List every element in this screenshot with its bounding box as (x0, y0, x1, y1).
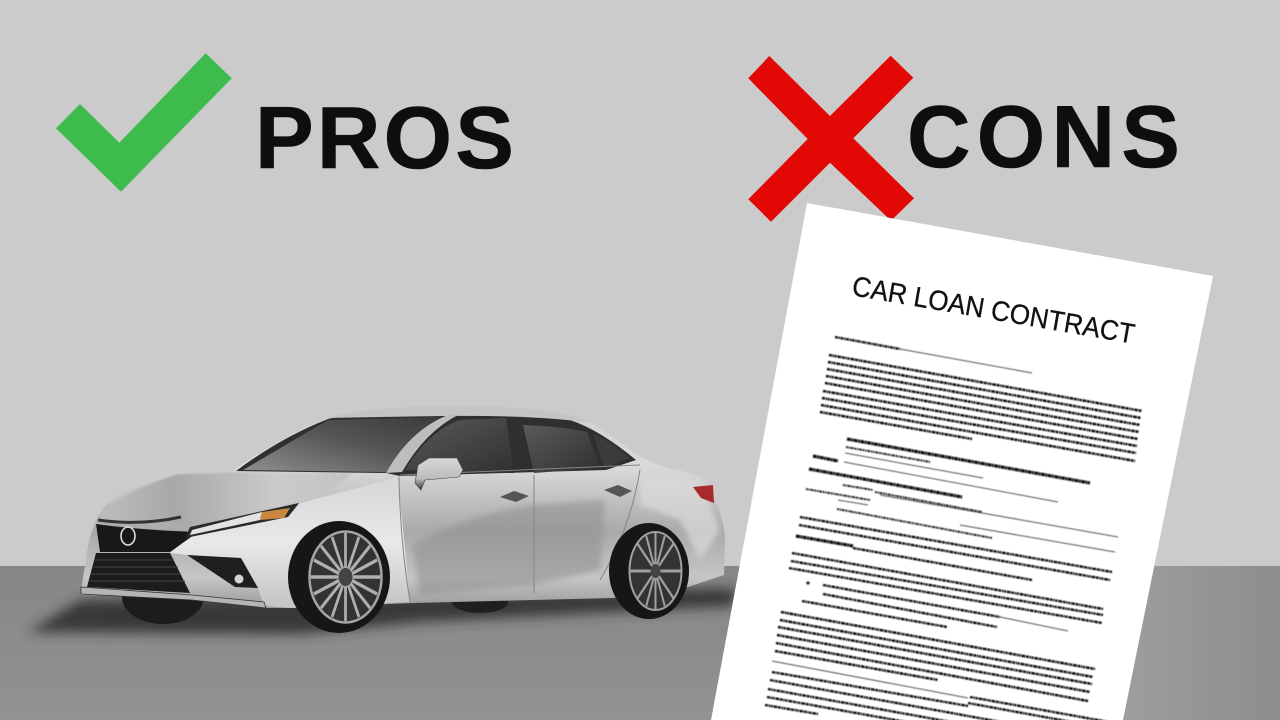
document: car loan contract (711, 203, 1213, 720)
front wheel (288, 521, 390, 633)
wall background (0, 0, 1280, 567)
section rules (838, 453, 1118, 552)
hood grille trim (98, 517, 181, 522)
icon: green check mark (56, 53, 232, 192)
rear side window (523, 425, 600, 473)
section heading lines (796, 439, 1090, 546)
paragraph three rule (772, 661, 968, 698)
paragraph three (775, 612, 1095, 701)
headlight (185, 503, 299, 538)
trailing rule (1000, 617, 1068, 631)
bullet (806, 581, 810, 585)
intro rule (900, 349, 1032, 373)
fog lamp intake (187, 555, 258, 588)
front side window (405, 418, 514, 473)
front lip (81, 587, 266, 608)
icon: red cross (748, 56, 914, 222)
upper grille with badge (96, 524, 198, 552)
lower grille (87, 553, 190, 593)
hood (120, 472, 350, 522)
windshield (243, 417, 442, 472)
tail lamp (693, 485, 714, 503)
pros heading group (56, 53, 514, 192)
car body (81, 406, 725, 608)
far side front wheel (122, 570, 204, 624)
cons heading group (748, 56, 1180, 222)
illustration: silver sedan (28, 406, 735, 634)
car floor shadow (28, 588, 735, 634)
a-pillar (386, 415, 458, 473)
door shading (412, 500, 605, 595)
paragraph one (820, 355, 1142, 461)
greenhouse frame (236, 414, 636, 476)
rear quarter panel highlight (640, 475, 720, 560)
heading: PROS: PROS (255, 88, 514, 187)
rear wheel (609, 523, 689, 619)
front fender and bumper (170, 477, 410, 608)
paragraph four (765, 672, 1120, 720)
paragraph two (789, 517, 1112, 627)
heading: CONS: CONS (907, 87, 1180, 186)
document title: CAR LOAN CONTRACT (850, 270, 1137, 350)
far side rear wheel (452, 591, 508, 613)
rear quarter window (593, 433, 630, 468)
section fine print (806, 447, 992, 538)
floor (0, 566, 1280, 720)
roof highlight (326, 406, 591, 423)
door handles (500, 485, 632, 502)
paper sheet (711, 203, 1213, 720)
intro bold line (835, 337, 900, 349)
door seams (399, 465, 640, 602)
contract body text lines (765, 337, 1142, 720)
side mirror (415, 458, 463, 490)
